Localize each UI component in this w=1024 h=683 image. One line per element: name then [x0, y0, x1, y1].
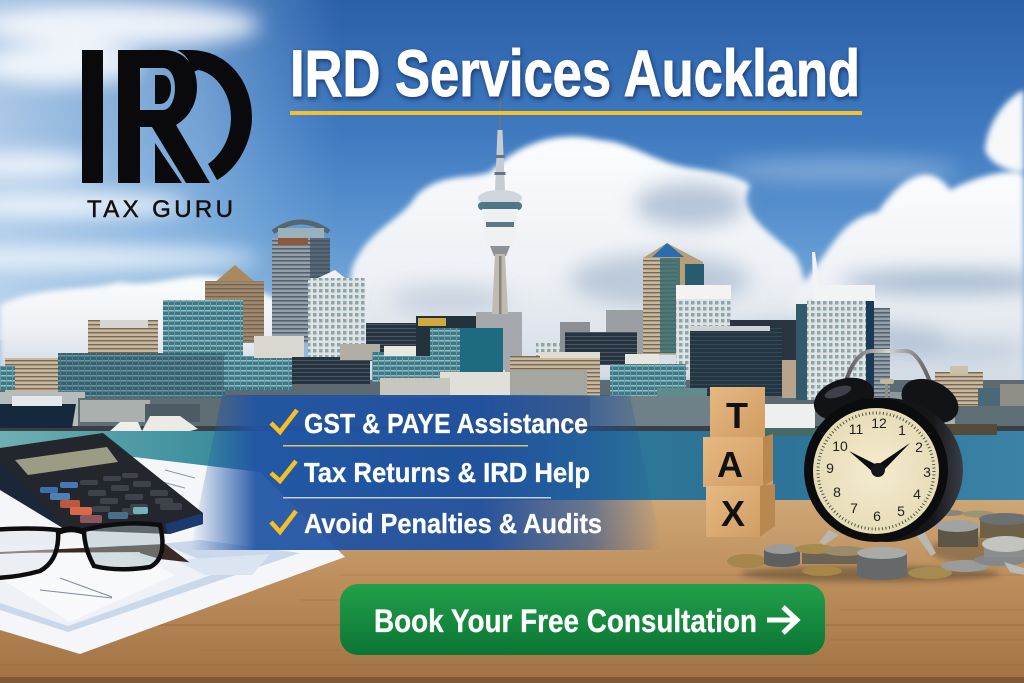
- call to action button: [340, 584, 825, 655]
- logo R lower wedge: [155, 143, 182, 183]
- icon: calculator: [0, 433, 203, 534]
- logo letter R: [118, 50, 210, 183]
- title: IRD Services Auckland: [290, 36, 860, 110]
- logo letter D: [177, 50, 252, 180]
- coins: [727, 510, 1024, 582]
- icon: alarm clock: 4: [913, 486, 921, 502]
- icon: arrow: [767, 607, 797, 633]
- logo R inner counter: [155, 75, 171, 104]
- icon: alarm clock: 6: [873, 508, 881, 524]
- boats and shoreline: [0, 396, 1024, 436]
- icon: glasses: [0, 523, 186, 578]
- wooden table: [0, 500, 1024, 683]
- skyline: [0, 222, 1024, 430]
- papers: [0, 457, 345, 654]
- background: clouds: [0, 0, 1024, 385]
- row: Avoid Penalties: Avoid Penalties & Audits: [304, 508, 602, 539]
- button label: Book Your Free Consultation: [374, 603, 757, 639]
- icon: alarm clock: 8: [833, 484, 841, 500]
- icon: alarm clock: 7: [850, 500, 858, 516]
- Sky Tower: [478, 98, 522, 314]
- title underline: [290, 111, 862, 115]
- logo letter I: [82, 50, 103, 183]
- icon: TAX wooden blocks: X: [721, 493, 745, 534]
- icon: alarm clock: [804, 351, 966, 556]
- icon: alarm clock: 1: [898, 422, 906, 438]
- row: GST: GST & PAYE Assistance: [304, 408, 588, 439]
- harbour water: [0, 430, 1024, 510]
- icon: TAX wooden blocks: [703, 387, 775, 537]
- icon: alarm clock: 10: [832, 438, 848, 454]
- icon: alarm clock: 5: [897, 503, 905, 519]
- background: sky: [0, 0, 1024, 440]
- logo: IRD Tax Guru: [82, 50, 252, 223]
- icon: alarm clock: 2: [915, 439, 923, 455]
- list panel: [190, 395, 662, 550]
- logo tagline: TAX GURU: [87, 196, 233, 223]
- icon: alarm clock: 12: [871, 415, 887, 431]
- icon: TAX wooden blocks: T: [726, 395, 748, 436]
- icon: alarm clock: 9: [826, 460, 834, 476]
- icon: alarm clock: 11: [849, 421, 863, 437]
- icon: alarm clock: 3: [923, 464, 931, 480]
- row: Tax Returns: Tax Returns & IRD Help: [304, 457, 590, 488]
- icon: TAX wooden blocks: A: [717, 444, 743, 485]
